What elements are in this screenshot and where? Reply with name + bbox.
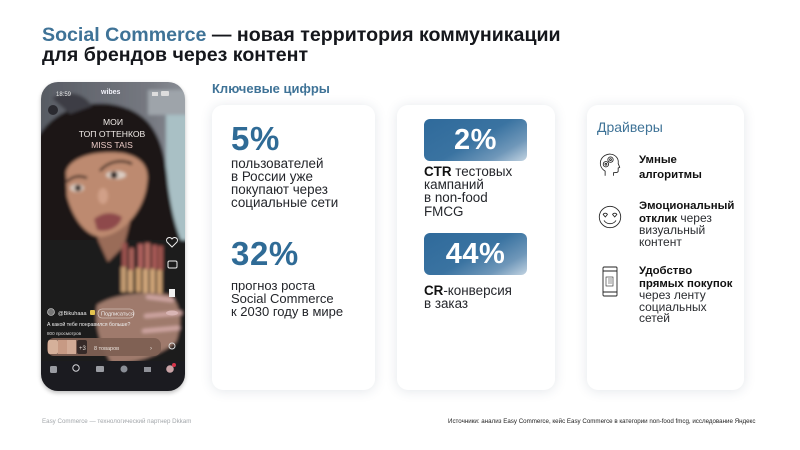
text: growth forecast: к 2030 году в мире bbox=[231, 304, 343, 319]
overlay heading: МОИ bbox=[103, 117, 123, 127]
jacket bbox=[41, 238, 185, 361]
text: CR bbox=[424, 283, 512, 311]
hand bbox=[96, 293, 180, 364]
text: share of users bbox=[231, 156, 338, 210]
panel: campaign figures bbox=[397, 105, 555, 390]
product strip bbox=[47, 338, 161, 356]
text: convenience of purchases bbox=[639, 265, 732, 325]
phone mockup: MISS TAIS bbox=[91, 140, 133, 150]
text: share of users: социальные сети bbox=[231, 195, 338, 210]
panel: market figures bbox=[212, 105, 375, 390]
icon: smartphone bbox=[602, 266, 618, 296]
drivers heading: Драйверы bbox=[597, 119, 663, 135]
text: CR: CR-конверсия bbox=[424, 283, 512, 298]
text: emotional response: отклик через bbox=[639, 211, 712, 225]
panel: drivers bbox=[587, 105, 744, 390]
text: convenience of purchases: сетей bbox=[639, 311, 670, 325]
hair bbox=[41, 102, 182, 244]
phone mockup: wibes bbox=[100, 89, 121, 96]
text: growth forecast bbox=[231, 278, 343, 319]
text: CTR: FMCG bbox=[424, 204, 463, 219]
text: smart algorithms: алгоритмы bbox=[639, 169, 702, 181]
phone mockup: 800 просмотров bbox=[47, 331, 82, 336]
eyes, brows, nose, lips bbox=[106, 171, 126, 179]
neck bbox=[95, 222, 130, 262]
text: convenience of purchases: через ленту bbox=[639, 288, 706, 302]
section heading: Ключевые цифры bbox=[212, 81, 330, 96]
phone mockup: Подписаться bbox=[101, 312, 134, 318]
text: growth forecast: Social Commerce bbox=[231, 291, 334, 306]
author line bbox=[48, 308, 54, 316]
footer sources: Источники: анализ Easy Commerce, кейс Easy Commerce в категории non-food fmcg, исследование Яндекс bbox=[448, 418, 755, 425]
status bar: 18:59 bbox=[56, 92, 72, 98]
text: growth forecast: прогноз роста bbox=[231, 278, 315, 292]
title: Social Commerce — новая территория коммуникации bbox=[42, 24, 561, 46]
figure: 5%: 5% bbox=[231, 120, 280, 157]
phone mockup: 8 товаров bbox=[94, 346, 119, 352]
text: CTR: CTR тестовых bbox=[424, 164, 512, 179]
window light bbox=[166, 105, 188, 240]
text: CTR: кампаний bbox=[424, 177, 484, 192]
side icons bbox=[167, 238, 177, 247]
icon: head with gears bbox=[600, 154, 620, 176]
badge: 2%: 2% bbox=[454, 124, 497, 156]
text: smart algorithms bbox=[639, 154, 702, 181]
text: share of users: пользователей bbox=[231, 156, 323, 170]
bottom nav bbox=[41, 361, 185, 393]
face bbox=[66, 152, 148, 237]
pencils bbox=[122, 243, 127, 267]
phone mockup: ТОП ОТТЕНКОВ bbox=[79, 129, 146, 139]
text: emotional response bbox=[639, 200, 734, 249]
title bbox=[42, 24, 561, 66]
text: convenience of purchases: Удобство bbox=[639, 265, 692, 277]
photo bbox=[41, 82, 185, 361]
badge: 44%: 44% bbox=[446, 238, 505, 270]
title: для брендов через контент bbox=[42, 44, 308, 66]
text: emotional response: контент bbox=[639, 235, 682, 249]
text: share of users: покупают через bbox=[231, 182, 328, 197]
badge: 44% bbox=[424, 233, 527, 275]
text: CTR bbox=[424, 164, 512, 219]
text: convenience of purchases: прямых покупок bbox=[639, 278, 732, 290]
phone mockup: А какой тебе понравился больше? bbox=[47, 321, 130, 328]
badge: 2% bbox=[424, 119, 527, 161]
text: share of users: в России уже bbox=[231, 169, 313, 184]
phone mockup: +3 bbox=[79, 346, 87, 352]
icon: smiling face bbox=[598, 206, 622, 228]
phone mockup bbox=[38, 82, 188, 396]
phone mockup: @Bikuhaaa bbox=[58, 311, 87, 317]
text: emotional response: визуальный bbox=[639, 223, 705, 237]
text: CTR: в non-food bbox=[424, 190, 488, 205]
text: CR: в заказ bbox=[424, 296, 468, 311]
phone mockup: › bbox=[150, 346, 152, 352]
text: smart algorithms: Умные bbox=[639, 154, 677, 166]
figure: 32%: 32% bbox=[231, 235, 299, 272]
footer left note: Easy Commerce — технологический партнер Dkkam bbox=[42, 418, 191, 425]
text: convenience of purchases: социальных bbox=[639, 300, 707, 314]
text: emotional response: Эмоциональный bbox=[639, 200, 734, 212]
